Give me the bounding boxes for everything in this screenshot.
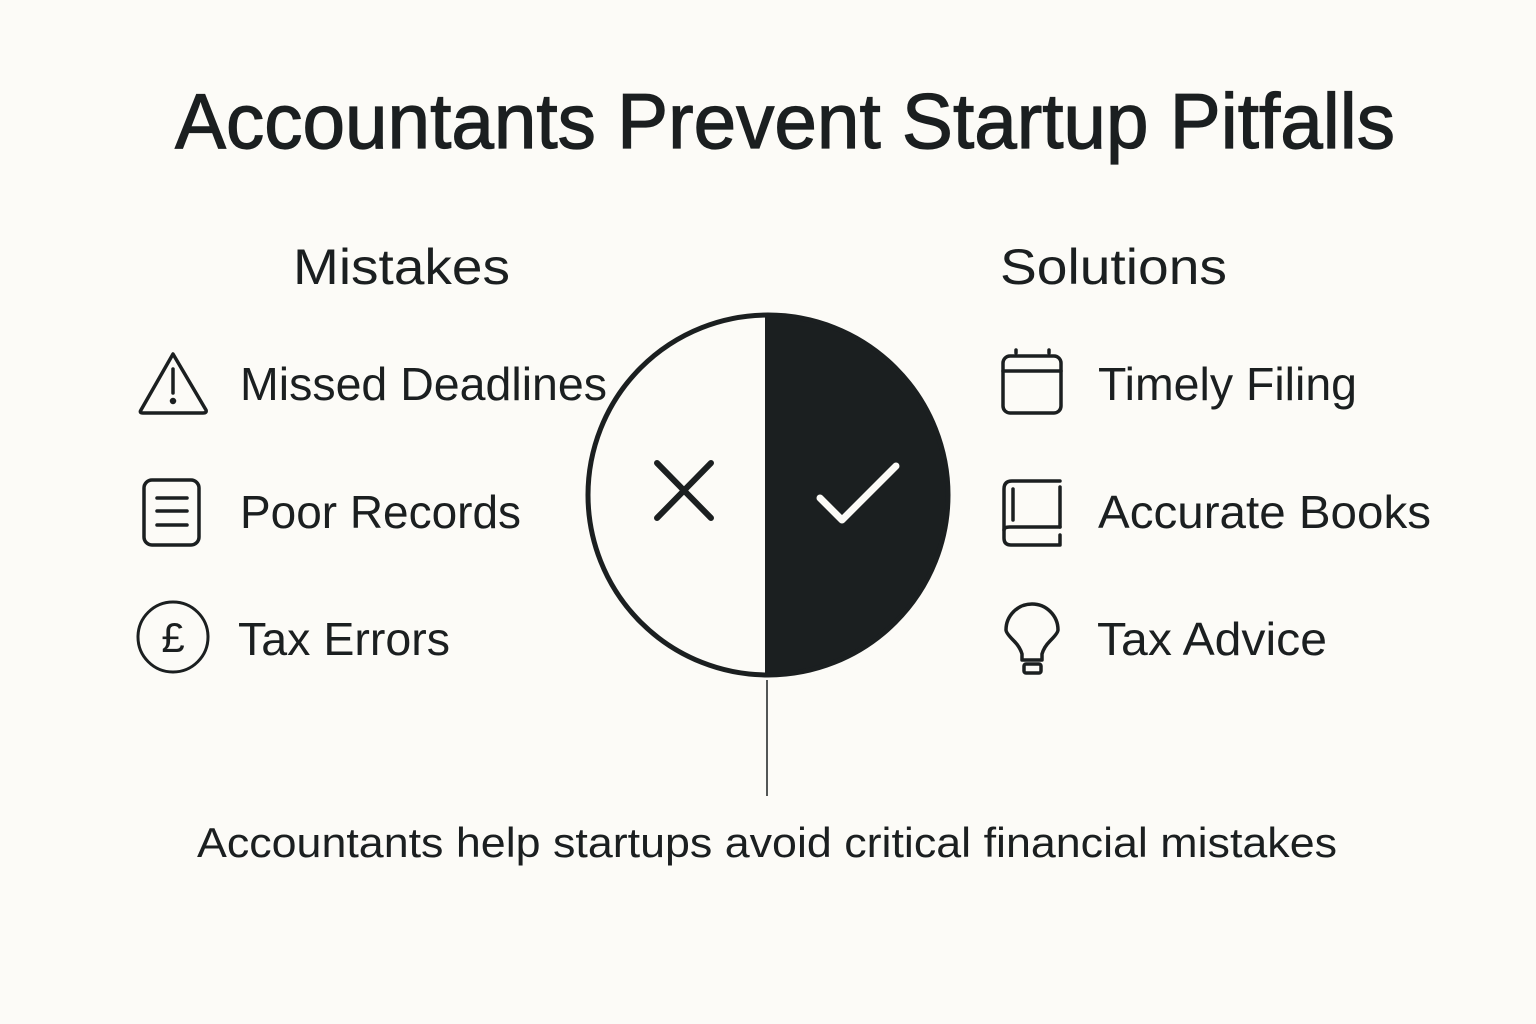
- text: Tax Advice: Tax Advice: [1097, 613, 1327, 665]
- icon: book: [1004, 481, 1060, 545]
- caption: Accountants help startups avoid critical financial mistakes: [197, 819, 1337, 866]
- panel: solutions list: [1003, 350, 1431, 673]
- icon: cross: [657, 463, 711, 518]
- text: Tax Errors: Tax Errors: [238, 613, 450, 665]
- panel: mistakes list: [138, 354, 607, 672]
- heading: Solutions: Solutions: [1000, 239, 1227, 295]
- title: Accountants Prevent Startup Pitfalls: [175, 77, 1395, 165]
- text: Timely Filing: Timely Filing: [1098, 358, 1357, 410]
- heading: Mistakes: Mistakes: [293, 239, 510, 295]
- icon: check: [820, 466, 896, 520]
- icon: light bulb: [1006, 604, 1058, 673]
- icon: calendar: [1003, 350, 1061, 413]
- text: Accurate Books: Accurate Books: [1098, 486, 1431, 538]
- icon: warning triangle: [140, 354, 206, 413]
- connector line: [766, 680, 768, 796]
- icon: pound coin: £: [161, 614, 185, 661]
- central split circle: [588, 313, 948, 677]
- text: Poor Records: Poor Records: [240, 486, 521, 538]
- text: Missed Deadlines: Missed Deadlines: [240, 358, 607, 410]
- icon: document: [144, 480, 199, 545]
- icon: pound coin: [138, 602, 208, 672]
